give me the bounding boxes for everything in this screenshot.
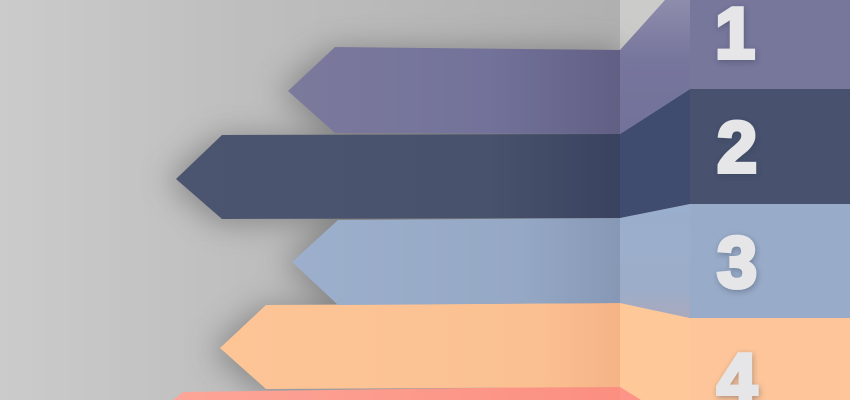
side wall corner bbox=[620, 0, 690, 60]
arrow 5: coral bbox=[173, 386, 642, 400]
wall background bbox=[0, 0, 620, 400]
arrow 1: purple bbox=[288, 0, 850, 134]
arrow 2: navy bbox=[176, 89, 850, 219]
arrow 4: peach bbox=[220, 303, 850, 400]
arrow 3: light blue bbox=[292, 204, 850, 318]
number 3: 3 bbox=[717, 223, 757, 303]
arrow shadows bbox=[168, 50, 620, 392]
number 2: 2 bbox=[717, 108, 757, 188]
